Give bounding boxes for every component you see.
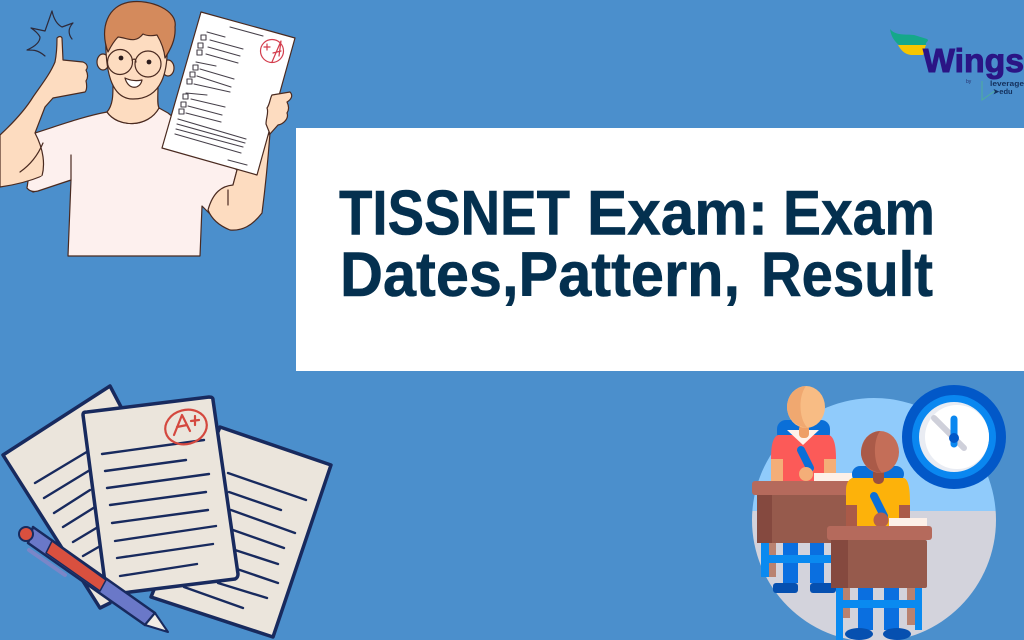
clock [902, 385, 1006, 489]
front student [836, 431, 927, 640]
title: Exam: [587, 178, 768, 248]
title: Exam [783, 178, 935, 248]
front desk [827, 526, 932, 588]
lower arm [208, 133, 270, 230]
illustration: students writing an exam [750, 385, 1006, 640]
sleeve [27, 160, 71, 192]
logo: Wings by leverage edu: Wings [923, 42, 1024, 79]
shirt [27, 108, 237, 256]
ears [97, 54, 109, 70]
logo: Wings by leverage edu [890, 29, 1024, 100]
logo: Wings by leverage edu: by [966, 79, 972, 85]
title: Result [761, 240, 933, 310]
illustration: graded papers and pen [3, 386, 331, 637]
raised arm [0, 36, 88, 187]
title: TISSNET [339, 178, 570, 248]
right paper [151, 427, 331, 637]
title: Dates,Pattern, [340, 240, 740, 310]
panel: title card [296, 128, 1024, 371]
pen shadow [29, 550, 65, 575]
logo: Wings by leverage edu: leverage [990, 79, 1024, 88]
hair [105, 2, 175, 58]
lines on side papers [35, 450, 306, 608]
logo: Wings by leverage edu: ➤edu [993, 87, 1013, 96]
text lines [102, 440, 216, 576]
left paper [3, 386, 170, 608]
mouth [125, 78, 142, 87]
illustration: student holding exam paper [0, 2, 295, 256]
icon: spark [27, 11, 73, 56]
back desk [752, 481, 852, 543]
title [339, 178, 935, 310]
neck [107, 85, 159, 124]
middle paper [83, 397, 238, 594]
glasses [108, 50, 132, 74]
back student [761, 386, 852, 593]
grade stamp [161, 405, 211, 449]
hand [266, 92, 292, 134]
pen [28, 527, 155, 625]
paper [162, 12, 295, 175]
grade stamp [260, 40, 284, 62]
face [106, 30, 167, 99]
